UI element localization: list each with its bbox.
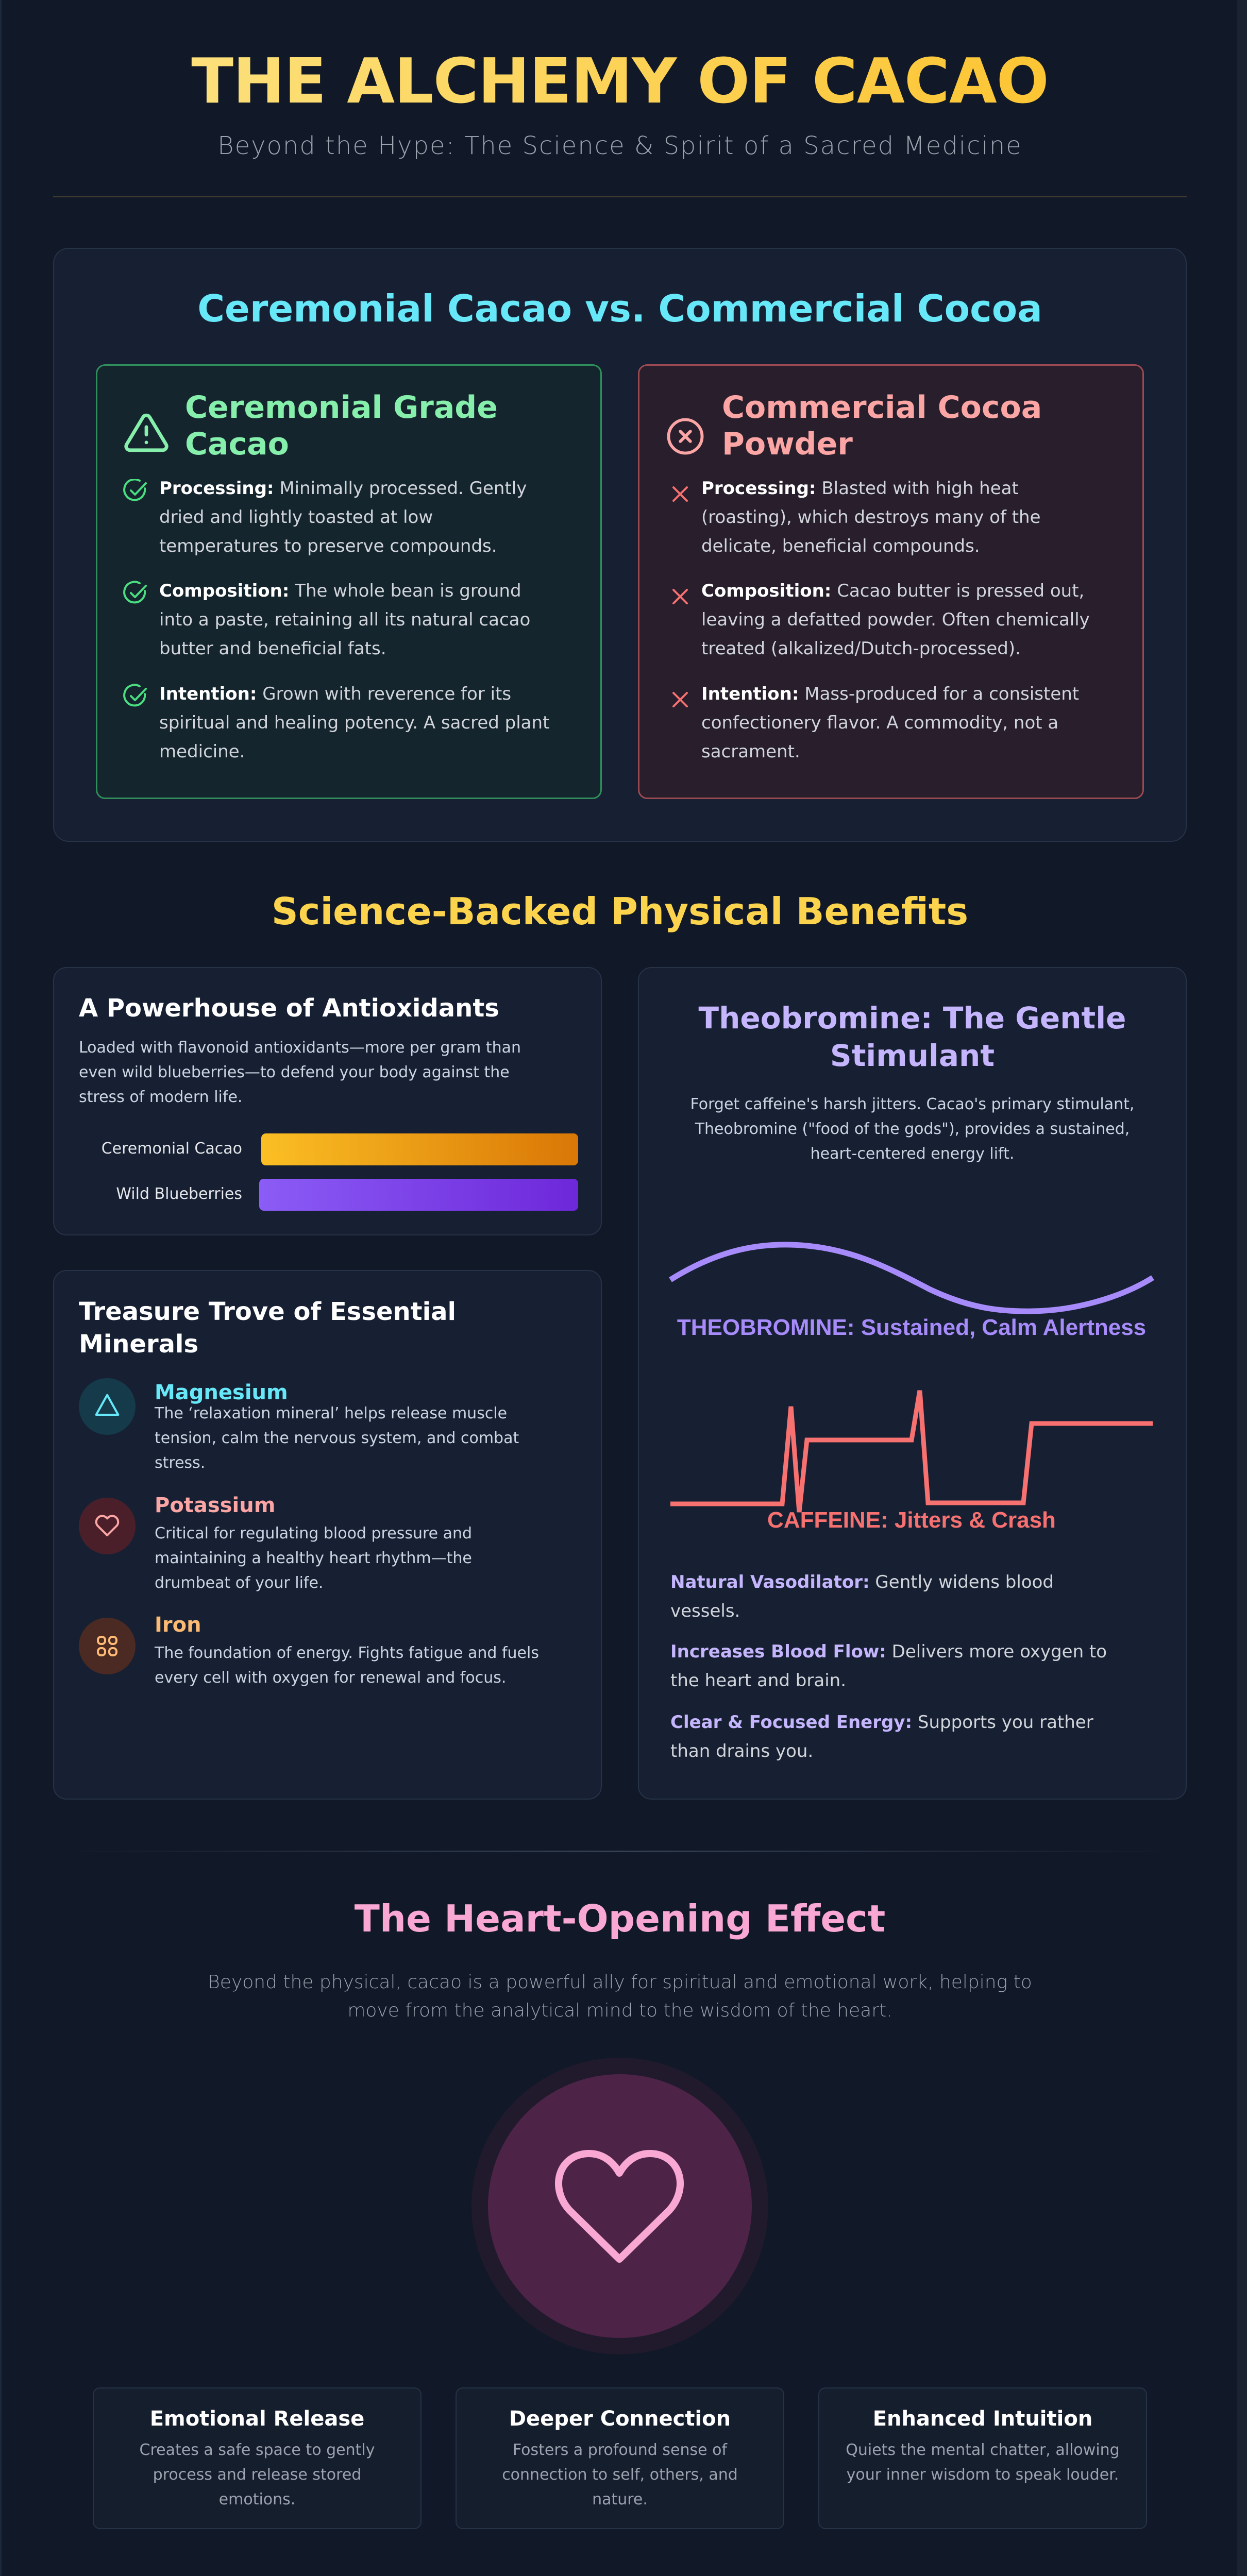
panel: comparison (53, 248, 1187, 842)
theobromine heading: Stimulant (830, 1038, 995, 1073)
mineral: magnesium (79, 1378, 519, 1472)
antioxidants text (79, 1039, 521, 1106)
card: enhanced intuition: Quiets the mental chatter, allowing (846, 2441, 1120, 2459)
card: minerals (53, 1270, 602, 1800)
card: emotional release: process and release stored (153, 2466, 361, 2484)
card: deeper connection: nature. (592, 2490, 648, 2509)
caffeine line: CAFFEINE: Jitters & Crash (767, 1507, 1056, 1533)
ceremonial heading: Ceremonial Grade (185, 389, 498, 426)
mineral: magnesium: The ‘relaxation mineral’ helps release muscle (155, 1404, 507, 1422)
antioxidants text: even wild blueberries—to defend your body against the (79, 1063, 510, 1081)
mineral: iron (79, 1613, 539, 1687)
commercial heading (722, 389, 1042, 462)
item: intention (159, 684, 549, 762)
comparison heading: Ceremonial Cacao vs. Commercial Cocoa (197, 287, 1042, 330)
item: composition: treated (alkalized/Dutch-processed). (701, 638, 1021, 659)
mineral: magnesium: stress. (155, 1454, 205, 1472)
card: enhanced intuition: Enhanced Intuition (873, 2407, 1092, 2431)
theobromine heading: Theobromine: The Gentle (699, 1001, 1126, 1036)
theobromine wave (670, 1245, 1153, 1340)
heart text (208, 1972, 1032, 2021)
minerals heading: Treasure Trove of Essential (79, 1297, 456, 1326)
title (2, 48, 1238, 115)
item: processing: (roasting), which destroys many of the (701, 507, 1041, 528)
mineral: magnesium: tension, calm the nervous system, and combat (155, 1429, 519, 1447)
mineral: potassium: Critical for regulating blood pressure and (155, 1524, 472, 1543)
minerals heading (79, 1297, 456, 1359)
icon: heart circle (465, 2050, 774, 2360)
card: deeper connection: connection to self, others, and (502, 2466, 738, 2484)
theobromine bullets (670, 1572, 1107, 1761)
icon: crosses (672, 486, 688, 708)
mineral: iron: Iron (155, 1613, 201, 1637)
item: composition: into a paste, retaining all its natural cacao (159, 609, 530, 630)
item: processing (701, 478, 1041, 556)
theobromine bullets: Clear & Focused Energy: Supports you rather (670, 1712, 1093, 1733)
item: intention: medicine. (159, 741, 245, 762)
antioxidants text: Loaded with flavonoid antioxidants—more per gram than (79, 1039, 521, 1057)
bar chart: Ceremonial Cacao (102, 1140, 242, 1158)
card: theobromine (638, 967, 1187, 1800)
item: processing (159, 478, 527, 556)
chart: theobromine vs caffeine (669, 1242, 1154, 1533)
theobromine bullets: Natural Vasodilator: Gently widens blood (670, 1572, 1054, 1592)
antioxidants heading: A Powerhouse of Antioxidants (79, 994, 499, 1023)
caffeine line (670, 1391, 1153, 1533)
card: enhanced intuition (818, 2387, 1147, 2529)
item: intention: Intention: Grown with reverence for its (159, 684, 511, 704)
card: emotional release: emotions. (219, 2490, 295, 2509)
bar chart (102, 1133, 578, 1211)
item: intention: confectionery flavor. A commodity, not a (701, 713, 1058, 733)
bar chart: Wild Blueberries (116, 1185, 242, 1203)
antioxidants text: stress of modern life. (79, 1088, 242, 1106)
theobromine bullets: Increases Blood Flow: Delivers more oxygen to (670, 1641, 1107, 1662)
heart text: Beyond the physical, cacao is a powerful ally for spiritual and emotional work, helping to (208, 1972, 1032, 1993)
title: THE ALCHEMY OF CACAO (191, 46, 1049, 117)
ceremonial heading: Cacao (185, 426, 289, 462)
theobromine heading (699, 1001, 1126, 1073)
mineral: potassium: drumbeat of your life. (155, 1574, 323, 1592)
mineral: iron: The foundation of energy. Fights fatigue and fuels (155, 1644, 539, 1662)
card: deeper connection: Fosters a profound sense of (513, 2441, 727, 2459)
icon: checks (123, 479, 147, 707)
item: intention (701, 684, 1079, 762)
card: emotional release (93, 2387, 422, 2529)
item: intention: spiritual and healing potency. A sacred plant (159, 713, 549, 733)
item: processing: Processing: Blasted with high heat (701, 478, 1019, 499)
mineral: iron: every cell with oxygen for renewal and focus. (155, 1669, 506, 1687)
mineral: potassium (79, 1494, 472, 1592)
theobromine wave: THEOBROMINE: Sustained, Calm Alertness (677, 1315, 1146, 1340)
card: enhanced intuition: your inner wisdom to speak louder. (847, 2466, 1119, 2484)
minerals heading: Minerals (79, 1330, 198, 1359)
science heading: Science-Backed Physical Benefits (272, 890, 968, 933)
card: commercial (638, 364, 1144, 799)
icon: warning (124, 413, 168, 452)
commercial heading: Commercial Cocoa (722, 389, 1042, 426)
item: composition (701, 581, 1090, 659)
card: emotional release: Emotional Release (150, 2407, 364, 2431)
theobromine text (690, 1095, 1134, 1163)
card: deeper connection: Deeper Connection (509, 2407, 731, 2431)
item: composition: butter and beneficial fats. (159, 638, 386, 659)
heart text: move from the analytical mind to the wisdom of the heart. (347, 2000, 892, 2021)
item: composition: Composition: Cacao butter is pressed out, (701, 581, 1084, 601)
mineral: potassium: maintaining a healthy heart rhythm—the (155, 1549, 472, 1567)
item: processing: delicate, beneficial compounds. (701, 536, 980, 556)
item: composition: Composition: The whole bean is ground (159, 581, 521, 601)
commercial heading: Powder (722, 426, 853, 462)
heart heading: The Heart-Opening Effect (355, 1897, 885, 1940)
item: composition (159, 581, 530, 659)
theobromine text: Theobromine ("food of the gods"), provides a sustained, (695, 1120, 1130, 1138)
mineral: potassium: Potassium (155, 1494, 275, 1517)
theobromine bullets: than drains you. (670, 1741, 813, 1761)
item: processing: dried and lightly toasted at low (159, 507, 433, 528)
item: intention: sacrament. (701, 741, 800, 762)
item: processing: temperatures to preserve compounds. (159, 536, 497, 556)
ceremonial heading (185, 389, 498, 462)
theobromine text: heart-centered energy lift. (811, 1145, 1014, 1163)
theobromine bullets: vessels. (670, 1601, 740, 1621)
item: intention: Intention: Mass-produced for a consistent (701, 684, 1079, 704)
theobromine bullets: the heart and brain. (670, 1670, 846, 1691)
item: processing: Processing: Minimally processed. Gently (159, 478, 527, 499)
subtitle: Beyond the Hype: The Science & Spirit of a Sacred Medicine (217, 131, 1022, 160)
theobromine text: Forget caffeine's harsh jitters. Cacao's primary stimulant, (690, 1095, 1134, 1113)
card: antioxidants (53, 967, 602, 1235)
card: ceremonial (96, 364, 602, 799)
card: deeper connection (456, 2387, 784, 2529)
mineral: magnesium: Magnesium (155, 1381, 288, 1404)
card: emotional release: Creates a safe space to gently (140, 2441, 375, 2459)
item: composition: leaving a defatted powder. Often chemically (701, 609, 1090, 630)
icon: x circle (667, 418, 704, 454)
